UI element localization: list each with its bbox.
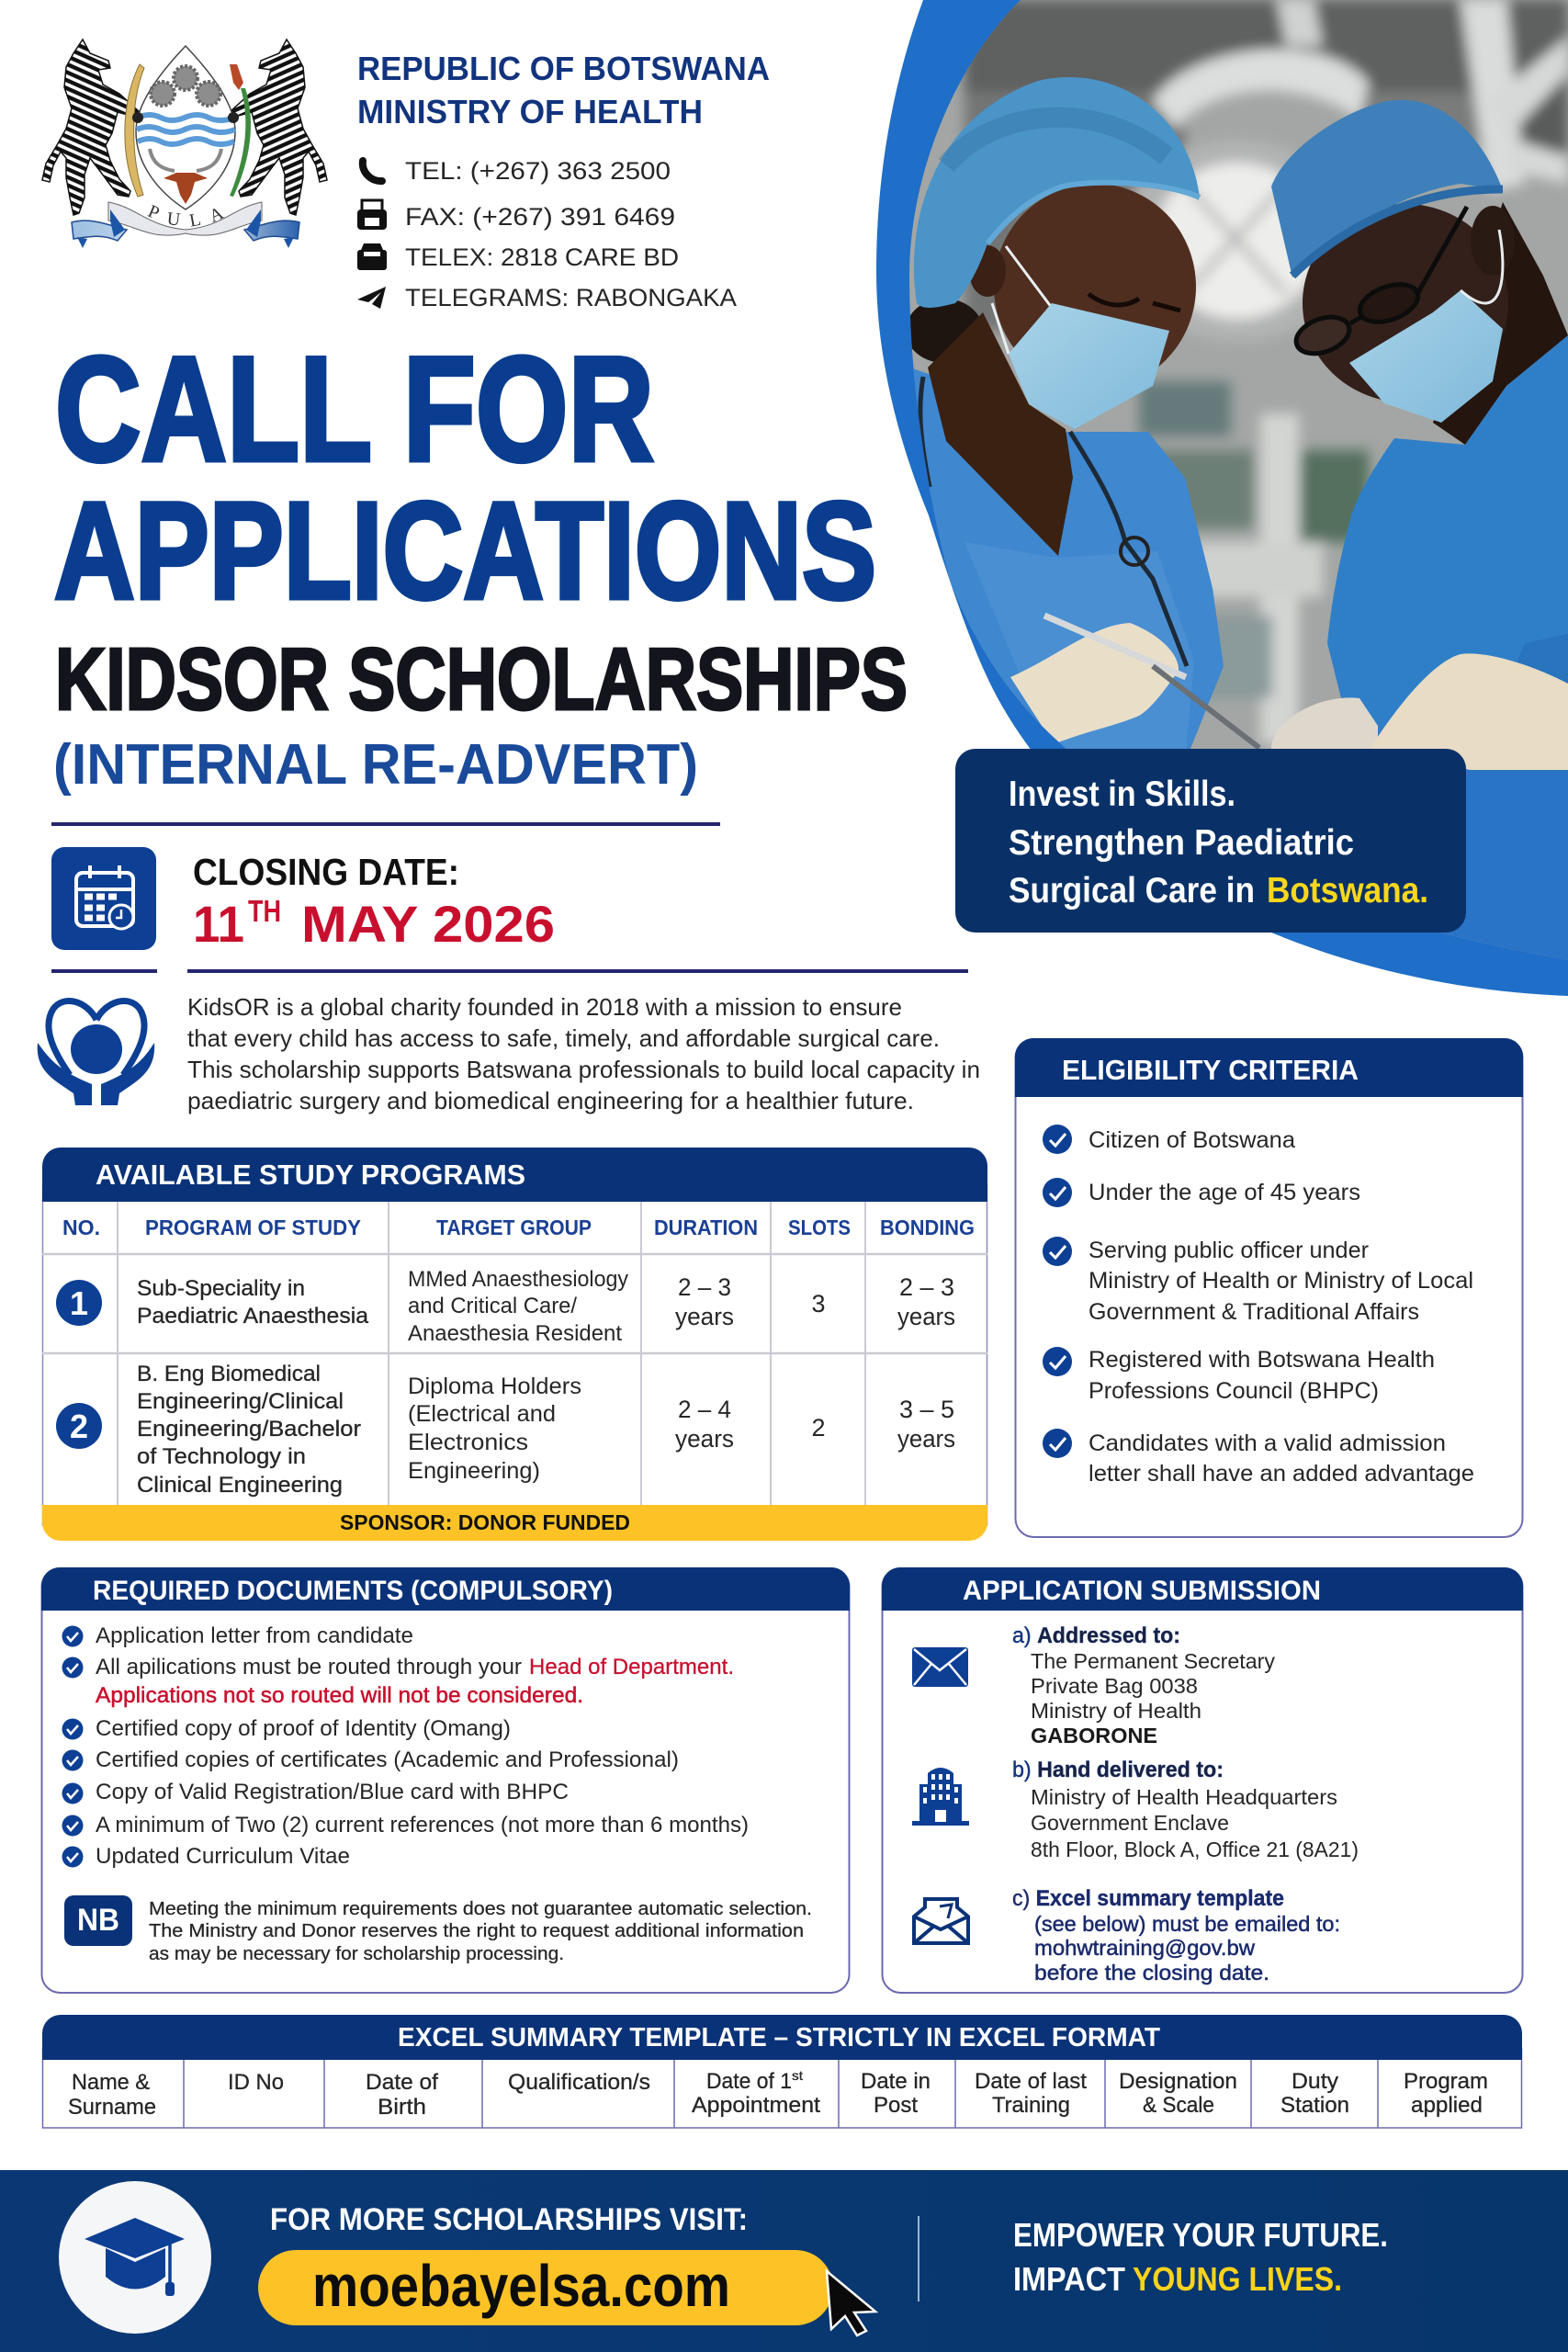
- row 1: years: [897, 1303, 955, 1330]
- excel column headings: & Scale: [1143, 2093, 1214, 2118]
- NB note: [149, 1899, 812, 1964]
- check list: letter shall have an added advantage: [1089, 1461, 1474, 1487]
- check list: Government & Traditional Affairs: [1089, 1299, 1419, 1325]
- panel: excel summary template: EXCEL SUMMARY TEMPLATE – STRICTLY IN EXCEL FORMAT: [398, 2023, 1160, 2052]
- document checklist: Certified copies of certificates (Academic and Professional): [96, 1747, 679, 1772]
- icon: calendar: [51, 847, 156, 950]
- title: [54, 326, 876, 628]
- contact details: TEL: (+267) 363 2500: [405, 157, 671, 185]
- row 2: of Technology in: [137, 1444, 306, 1469]
- ministry heading: [357, 50, 770, 130]
- excel column headings: Appointment: [692, 2093, 820, 2118]
- row 2: (Electrical and: [408, 1401, 556, 1427]
- check list: Candidates with a valid admission: [1089, 1430, 1446, 1456]
- excel column headings: Duty: [1292, 2069, 1338, 2094]
- document checklist: A minimum of Two (2) current references (not more than 6 months): [96, 1813, 749, 1838]
- subtitle: (INTERNAL RE-ADVERT): [53, 733, 698, 797]
- table column headings: DURATION: [654, 1216, 758, 1239]
- table column headings: SLOTS: [788, 1216, 851, 1239]
- excel column headings: Name &: [72, 2070, 150, 2095]
- website button: moebayelsa.com: [312, 2253, 730, 2319]
- excel column headings: Birth: [378, 2095, 426, 2120]
- closing date: TH: [248, 894, 281, 928]
- panel: excel summary template: [42, 2015, 1522, 2128]
- intro paragraph: This scholarship supports Batswana professionals to build local capacity in: [187, 1056, 980, 1083]
- icon: fax: [357, 200, 387, 230]
- icon: envelope: [912, 1647, 968, 1687]
- table column headings: PROGRAM OF STUDY: [145, 1216, 361, 1239]
- excel column headings: ID No: [228, 2070, 284, 2095]
- excel column headings: Designation: [1119, 2069, 1237, 2094]
- table column headings: TARGET GROUP: [436, 1216, 592, 1239]
- excel summary email: [1012, 1886, 1340, 1984]
- panel: available study programs: AVAILABLE STUDY PROGRAMS: [96, 1159, 525, 1191]
- row 2: 3 – 5: [899, 1396, 954, 1423]
- table column headings: [62, 1216, 975, 1239]
- contact details: [357, 157, 737, 311]
- panel: application submission: APPLICATION SUBMISSION: [963, 1576, 1321, 1606]
- table column headings: BONDING: [880, 1216, 975, 1239]
- NB note: as may be necessary for scholarship processing.: [149, 1944, 564, 1964]
- icon: mouse cursor: [827, 2271, 875, 2335]
- row 2: Electronics: [408, 1430, 528, 1455]
- closing date: CLOSING DATE:: [193, 851, 459, 893]
- photo: surgeons in operating theatre: [909, 0, 1568, 960]
- row 2: 2 – 4: [678, 1396, 731, 1423]
- slogan: YOUNG LIVES.: [1133, 2260, 1342, 2298]
- excel column headings: Date of last: [975, 2069, 1087, 2094]
- row 1: and Critical Care/: [408, 1294, 577, 1318]
- check list: Under the age of 45 years: [1089, 1180, 1360, 1205]
- document checklist: Application letter from candidate: [96, 1623, 413, 1648]
- addressed to: a) Addressed to:: [1012, 1623, 1180, 1648]
- check list: Professions Council (BHPC): [1089, 1378, 1379, 1404]
- title: CALL FOR: [55, 326, 654, 492]
- excel column headings: Date of 1: [706, 2069, 792, 2094]
- document checklist: Applications not so routed will not be considered.: [96, 1683, 583, 1708]
- document checklist: Copy of Valid Registration/Blue card with BHPC: [96, 1780, 569, 1804]
- excel summary email: before the closing date.: [1034, 1961, 1269, 1984]
- icon: paper plane: [357, 287, 386, 309]
- sponsor bar: [42, 1505, 987, 1541]
- excel summary email: mohwtraining@gov.bw: [1034, 1936, 1256, 1960]
- footer band: FOR MORE SCHOLARSHIPS VISIT:: [270, 2202, 748, 2237]
- excel summary email: (see below) must be emailed to:: [1034, 1912, 1340, 1936]
- eligibility header: [1015, 1038, 1523, 1097]
- slogan: [1013, 2216, 1388, 2298]
- closing date: MAY 2026: [301, 895, 555, 953]
- callout: invest in skills: Botswana.: [1267, 871, 1428, 910]
- NB note: The Ministry and Donor reserves the right to request additional information: [149, 1921, 804, 1941]
- row 2: years: [675, 1425, 734, 1453]
- excel column headings: Program: [1404, 2069, 1488, 2094]
- row 1: MMed Anaesthesiology: [408, 1267, 628, 1292]
- row 2: Clinical Engineering: [137, 1473, 343, 1498]
- hand delivered to: 8th Floor, Block A, Office 21 (8A21): [1031, 1838, 1359, 1861]
- contact details: FAX: (+267) 391 6469: [405, 203, 675, 231]
- callout: invest in skills: Strengthen Paediatric: [1009, 823, 1354, 863]
- NB note: Meeting the minimum requirements does not guarantee automatic selection.: [149, 1899, 812, 1919]
- documents header: [41, 1567, 850, 1611]
- NB badge: NB: [77, 1903, 119, 1938]
- addressed to: Private Bag 0038: [1031, 1674, 1198, 1698]
- document checklist: Head of Department.: [529, 1655, 734, 1679]
- intro paragraph: KidsOR is a global charity founded in 2018 with a mission to ensure: [187, 993, 902, 1021]
- excel column headings: Date in: [861, 2069, 931, 2094]
- addressed to: [1012, 1623, 1275, 1747]
- panel: application submission: [882, 1567, 1523, 1993]
- row 1: [56, 1267, 955, 1346]
- addressed to: GABORONE: [1031, 1724, 1157, 1747]
- subtitle: KIDSOR SCHOLARSHIPS: [55, 630, 908, 729]
- callout: invest in skills: Invest in Skills.: [1009, 775, 1235, 814]
- row 2: 2: [811, 1414, 826, 1442]
- gloved hands and forceps: [1010, 616, 1568, 770]
- row 2: Engineering/Bachelor: [137, 1417, 361, 1442]
- check list: Serving public officer under: [1089, 1238, 1369, 1263]
- title: APPLICATIONS: [54, 473, 876, 628]
- check list: Citizen of Botswana: [1089, 1127, 1295, 1153]
- hand delivered to: Government Enclave: [1031, 1811, 1229, 1835]
- icon: phone: [363, 161, 382, 181]
- document checklist: Updated Curriculum Vitae: [96, 1844, 350, 1869]
- coat of arms: [41, 39, 328, 248]
- row 2: [56, 1362, 955, 1498]
- excel column headings: applied: [1411, 2093, 1483, 2118]
- contact details: TELEGRAMS: RABONGAKA: [405, 284, 737, 311]
- panel: eligibility criteria: [1015, 1038, 1523, 1537]
- intro paragraph: [187, 993, 980, 1114]
- row 2: 2: [70, 1408, 88, 1445]
- icon: building: [912, 1768, 969, 1826]
- row 2: Diploma Holders: [408, 1374, 581, 1399]
- hand delivered to: b) Hand delivered to:: [1012, 1758, 1224, 1782]
- contact details: TELEX: 2818 CARE BD: [405, 243, 679, 271]
- panel: eligibility criteria: ELIGIBILITY CRITERIA: [1062, 1054, 1359, 1086]
- icon: heart and hands: [38, 1001, 154, 1105]
- row 1: Anaesthesia Resident: [408, 1321, 622, 1346]
- addressed to: Ministry of Health: [1031, 1699, 1201, 1723]
- excel column headings: Station: [1280, 2093, 1349, 2118]
- table column headings: NO.: [62, 1216, 100, 1239]
- ministry heading: REPUBLIC OF BOTSWANA: [357, 50, 770, 87]
- row 1: 2 – 3: [899, 1273, 954, 1301]
- row 1: Paediatric Anaesthesia: [137, 1304, 369, 1329]
- hand delivered to: [1012, 1758, 1359, 1861]
- subtitle: [53, 630, 908, 797]
- excel header: [42, 2015, 1522, 2060]
- icon: graduation cap: [59, 2181, 211, 2334]
- excel column headings: Post: [874, 2093, 918, 2118]
- row 1: 1: [70, 1284, 88, 1322]
- addressed to: The Permanent Secretary: [1031, 1649, 1275, 1673]
- document checklist: All apilications must be routed through your: [96, 1655, 522, 1679]
- check list: Registered with Botswana Health: [1089, 1347, 1435, 1373]
- sponsor bar: SPONSOR: DONOR FUNDED: [340, 1510, 630, 1534]
- row 1: 3: [811, 1290, 826, 1317]
- row 1: years: [675, 1303, 734, 1330]
- ministry heading: MINISTRY OF HEALTH: [357, 93, 703, 130]
- icon: open mail: [914, 1899, 968, 1943]
- programs header: [42, 1148, 987, 1202]
- panel: required documents: REQUIRED DOCUMENTS (COMPULSORY): [93, 1576, 613, 1606]
- intro paragraph: paediatric surgery and biomedical engineering for a healthier future.: [187, 1087, 914, 1114]
- hand delivered to: Ministry of Health Headquarters: [1031, 1785, 1337, 1809]
- excel column headings: [68, 2068, 1488, 2120]
- slogan: EMPOWER YOUR FUTURE.: [1013, 2216, 1388, 2254]
- intro paragraph: that every child has access to safe, timely, and affordable surgical care.: [187, 1024, 940, 1052]
- excel column headings: st: [792, 2068, 803, 2083]
- woman surgeon: [906, 77, 1224, 763]
- document checklist: [62, 1623, 749, 1869]
- excel summary email: c) Excel summary template: [1012, 1886, 1284, 1911]
- row 2: Engineering/Clinical: [137, 1389, 344, 1414]
- closing date: 11: [193, 895, 244, 953]
- panel: required documents: [41, 1567, 850, 1993]
- check list: Ministry of Health or Ministry of Local: [1089, 1268, 1473, 1294]
- excel column headings: Date of: [366, 2070, 438, 2095]
- row 2: Engineering): [408, 1458, 540, 1484]
- footer band: [0, 2170, 1568, 2352]
- closing date: [193, 851, 555, 953]
- slogan: IMPACT: [1013, 2260, 1125, 2298]
- panel: available study programs: [42, 1148, 987, 1541]
- NB badge: [64, 1895, 132, 1946]
- submission header: [882, 1567, 1523, 1611]
- check list: [1043, 1125, 1474, 1487]
- man surgeon: [1271, 100, 1568, 969]
- icon: telex: [357, 243, 387, 270]
- excel column headings: Qualification/s: [508, 2070, 650, 2095]
- document checklist: Certified copy of proof of Identity (Omang): [96, 1716, 511, 1741]
- excel column headings: Surname: [68, 2095, 156, 2120]
- row 2: B. Eng Biomedical: [137, 1362, 321, 1386]
- blue arc band: [876, 0, 1568, 996]
- coat of arms: PULA: [147, 204, 224, 227]
- row 1: 2 – 3: [678, 1273, 731, 1301]
- callout: invest in skills: [955, 749, 1466, 933]
- excel column headings: Training: [992, 2093, 1070, 2118]
- row 2: years: [897, 1425, 955, 1453]
- row 1: Sub-Speciality in: [137, 1276, 305, 1301]
- callout: invest in skills: Surgical Care in: [1009, 871, 1255, 910]
